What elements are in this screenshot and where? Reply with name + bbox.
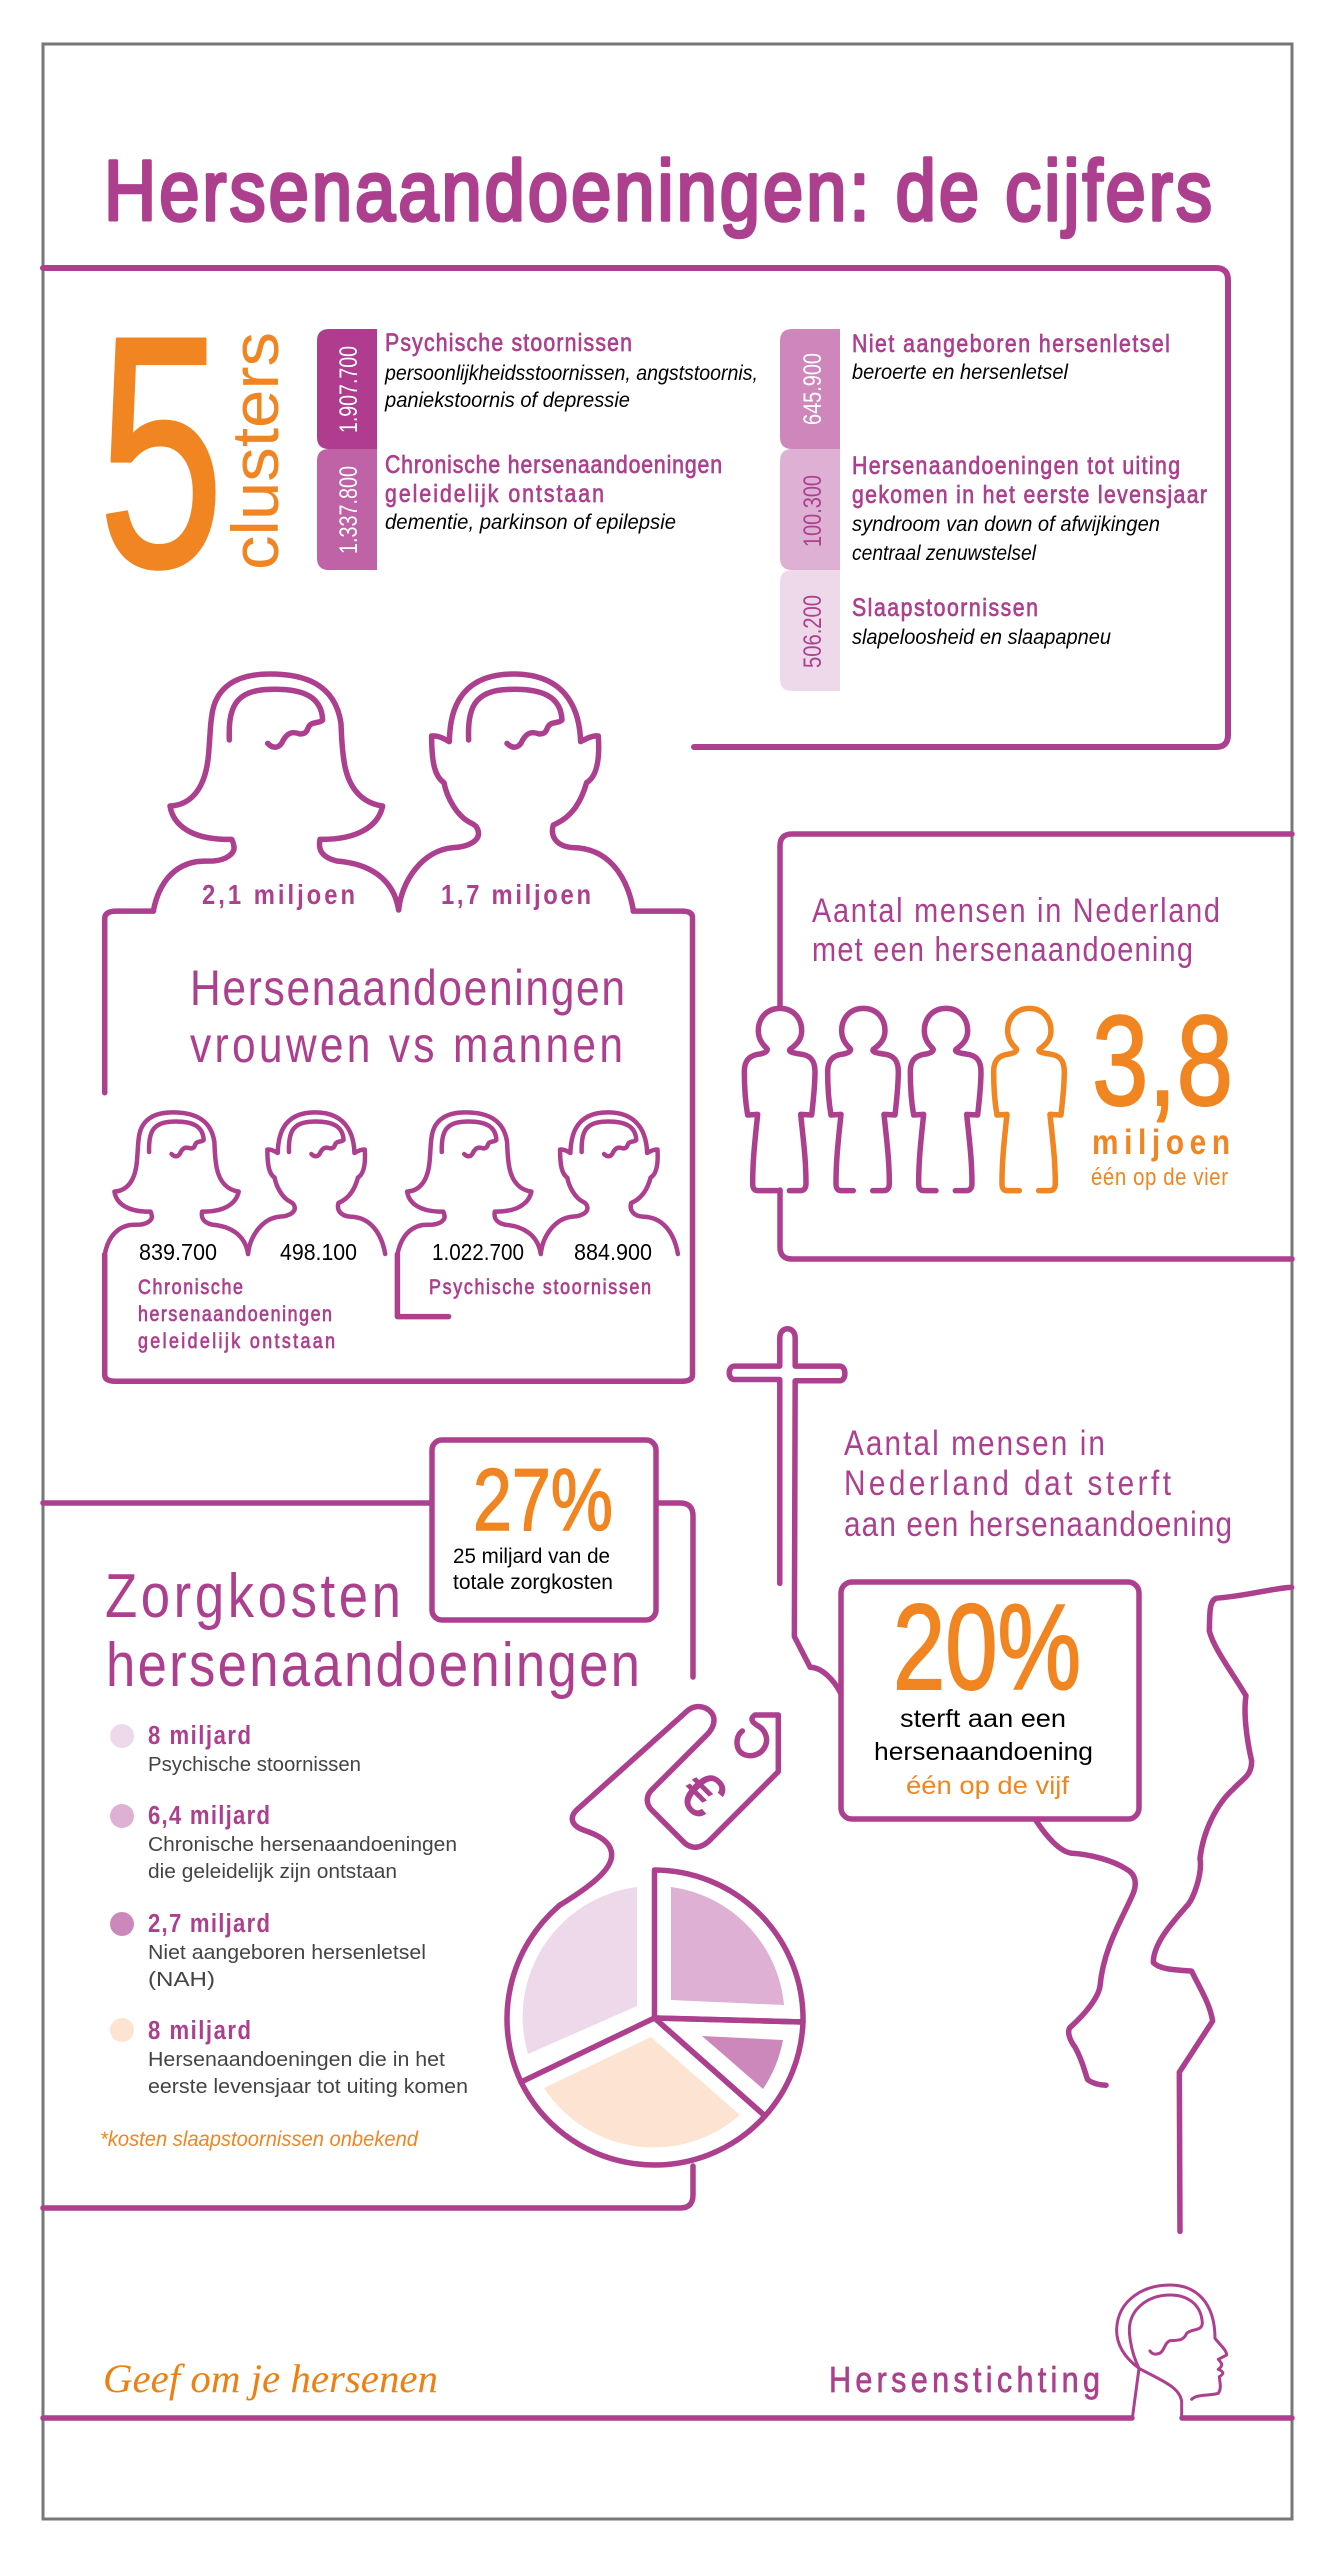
legend item: NAH: 2,7 miljard bbox=[148, 1909, 270, 1938]
label: 1,7 miljoen: 1,7 miljoen bbox=[441, 878, 591, 910]
heading: sterfte: Nederland dat sterft bbox=[844, 1464, 1171, 1503]
legend item: eerste levensjaar: 8 miljard bbox=[148, 2016, 251, 2045]
cluster text: eerste levensjaar bbox=[852, 451, 1207, 565]
bar: eerste levensjaar: 100.300 bbox=[799, 475, 827, 547]
cluster text: slaapstoornissen bbox=[852, 593, 1111, 649]
heading: Aantal mensen in Nederland bbox=[812, 891, 1220, 930]
legend item: psychische stoornissen: 8 miljard bbox=[148, 1721, 251, 1750]
cluster text: psychische stoornissen: persoonlijkheidsstoornissen, angststoornis, bbox=[384, 362, 758, 385]
bar: eerste levensjaar bbox=[780, 449, 840, 570]
slice fills bbox=[671, 1887, 784, 2005]
cluster text: eerste levensjaar: Hersenaandoeningen tot uiting bbox=[852, 451, 1180, 479]
cluster text: chronische hersenaandoeningen bbox=[385, 450, 722, 534]
panel: 5 clusters bbox=[43, 267, 1228, 747]
heading: Zorgkosten bbox=[105, 1562, 401, 1631]
panel outline bbox=[43, 1503, 693, 2208]
brand name: Hersenstichting bbox=[829, 2361, 1100, 2401]
big number 5: 5 bbox=[98, 267, 224, 636]
cluster text: slaapstoornissen: slapeloosheid en slaapapneu bbox=[852, 626, 1111, 649]
legend item: chronische: die geleidelijk zijn ontstaan bbox=[148, 1861, 397, 1883]
legend item: NAH: (NAH) bbox=[148, 1969, 215, 1991]
cluster text: psychische stoornissen bbox=[384, 328, 758, 412]
cluster text: eerste levensjaar: syndroom van down of afwijkingen bbox=[852, 513, 1160, 536]
bar: chronische hersenaandoeningen: 1.337.800 bbox=[335, 466, 363, 554]
bar: niet aangeboren hersenletsel bbox=[780, 329, 840, 449]
label: chronische hersenaandoeningen: Chronische bbox=[138, 1276, 243, 1299]
heading bbox=[105, 1562, 640, 1700]
callout text: één op de vijf bbox=[906, 1772, 1069, 1800]
heading bbox=[812, 891, 1220, 969]
slice outlines bbox=[654, 1870, 803, 2022]
cluster text: psychische stoornissen: Psychische stoornissen bbox=[385, 328, 632, 356]
legend item: NAH bbox=[110, 1909, 426, 1991]
heading: Hersenaandoeningen bbox=[190, 960, 625, 1016]
legend item: eerste levensjaar: eerste levensjaar tot uiting komen bbox=[148, 2076, 468, 2098]
callout: 27% bbox=[432, 1440, 656, 1620]
label: miljoen: miljoen bbox=[1092, 1123, 1230, 1162]
pie chart bbox=[507, 1870, 803, 2165]
panel: vrouwen vs mannen bbox=[105, 674, 693, 1381]
legend item: NAH: Niet aangeboren hersenletsel bbox=[148, 1942, 426, 1964]
silhouette lines bbox=[1037, 1587, 1292, 2231]
bar: chronische hersenaandoeningen bbox=[317, 449, 377, 570]
legend item: psychische stoornissen: Psychische stoornissen bbox=[148, 1754, 361, 1776]
legend item: chronische: Chronische hersenaandoeningen bbox=[148, 1834, 457, 1856]
label: chronische hersenaandoeningen: geleidelijk ontstaan bbox=[138, 1330, 335, 1353]
panel outline bbox=[780, 834, 1292, 1259]
panel outline bbox=[105, 911, 693, 1381]
cluster text: chronische hersenaandoeningen: dementie, parkinson of epilepsie bbox=[385, 511, 676, 534]
callout text bbox=[874, 1705, 1093, 1800]
heading: sterfte: aan een hersenaandoening bbox=[844, 1505, 1232, 1544]
callout: 20% bbox=[841, 1579, 1139, 1819]
bar: slaapstoornissen bbox=[780, 570, 840, 691]
figures: woman and man, total bbox=[153, 674, 633, 911]
number: 3,8: 3,8 bbox=[1092, 990, 1233, 1133]
icon: four people bbox=[744, 1008, 1064, 1191]
legend item: eerste levensjaar: Hersenaandoeningen die in het bbox=[148, 2049, 445, 2071]
bar: psychische stoornissen: 1.907.700 bbox=[335, 346, 363, 433]
heading bbox=[190, 960, 625, 1073]
panel: zorgkosten bbox=[43, 1440, 803, 2208]
bar: psychische stoornissen bbox=[317, 329, 377, 449]
label: een op de vier: één op de vier bbox=[1091, 1163, 1229, 1190]
figures: woman and man, chronische bbox=[105, 1112, 385, 1255]
title: Hersenaandoeningen: de cijfers bbox=[104, 143, 1212, 238]
clusters label: clusters bbox=[218, 332, 292, 570]
tagline: Geef om je hersenen bbox=[103, 2356, 438, 2401]
cluster text: eerste levensjaar: gekomen in het eerste levensjaar bbox=[852, 480, 1207, 508]
label: psychische stoornissen: Psychische stoornissen bbox=[429, 1276, 651, 1299]
cluster text: niet aangeboren hersenletsel: beroerte en hersenletsel bbox=[852, 361, 1069, 384]
heading: met een hersenaandoening bbox=[812, 930, 1193, 969]
numbers: psychische: 1.022.700 bbox=[432, 1239, 524, 1265]
cluster text: chronische hersenaandoeningen: geleidelijk ontstaan bbox=[385, 479, 604, 507]
callout text: sterft aan een bbox=[900, 1705, 1066, 1733]
cluster text: niet aangeboren hersenletsel bbox=[852, 329, 1170, 384]
callout: 27%: 27% bbox=[473, 1450, 613, 1549]
icon: price tag bbox=[560, 1707, 778, 1905]
numbers: psychische bbox=[432, 1239, 652, 1265]
label: chronische hersenaandoeningen: hersenaandoeningen bbox=[138, 1303, 332, 1326]
euro sign: € bbox=[665, 1757, 739, 1831]
cluster text: eerste levensjaar: centraal zenuwstelsel bbox=[852, 542, 1037, 565]
numbers: chronische bbox=[139, 1239, 357, 1265]
footer line bbox=[43, 2415, 1292, 2421]
callout: 27%: 25 miljard van de bbox=[453, 1545, 610, 1568]
heading: sterfte bbox=[844, 1424, 1232, 1544]
label: chronische hersenaandoeningen bbox=[138, 1276, 335, 1353]
callout: 27%: totale zorgkosten bbox=[453, 1571, 613, 1594]
number: 20%: 20% bbox=[893, 1579, 1081, 1715]
numbers: chronische: 839.700 bbox=[139, 1239, 217, 1265]
heading: sterfte: Aantal mensen in bbox=[844, 1424, 1105, 1463]
cluster text: slaapstoornissen: Slaapstoornissen bbox=[852, 593, 1038, 621]
heading: vrouwen vs mannen bbox=[190, 1017, 623, 1073]
callout text: hersenaandoening bbox=[874, 1738, 1093, 1766]
numbers: chronische: 498.100 bbox=[280, 1239, 357, 1265]
logo: head bbox=[1117, 2285, 1227, 2418]
heading: hersenaandoeningen bbox=[106, 1631, 640, 1700]
bar: slaapstoornissen: 506.200 bbox=[799, 595, 827, 668]
cluster text: niet aangeboren hersenletsel: Niet aangeboren hersenletsel bbox=[852, 329, 1170, 357]
legend item: eerste levensjaar bbox=[110, 2016, 468, 2098]
legend item: chronische: 6,4 miljard bbox=[148, 1801, 270, 1830]
footer bbox=[43, 2285, 1292, 2418]
legend item: psychische stoornissen bbox=[110, 1721, 361, 1776]
icon: cross with line to box bbox=[729, 1329, 845, 1693]
cluster text: psychische stoornissen: paniekstoornis of depressie bbox=[384, 389, 630, 412]
bar: niet aangeboren hersenletsel: 645.900 bbox=[799, 353, 827, 425]
panel: aantal mensen met hersenaandoening bbox=[744, 834, 1292, 1259]
footnote: *kosten slaapstoornissen onbekend bbox=[100, 2128, 419, 2151]
panel outline bbox=[43, 268, 1228, 747]
label: 2,1 miljoen: 2,1 miljoen bbox=[202, 878, 355, 910]
figures: woman and man, psychische bbox=[397, 1112, 678, 1255]
cluster text: chronische hersenaandoeningen: Chronische hersenaandoeningen bbox=[385, 450, 722, 478]
numbers: psychische: 884.900 bbox=[574, 1239, 652, 1265]
legend item: chronische bbox=[110, 1801, 457, 1883]
